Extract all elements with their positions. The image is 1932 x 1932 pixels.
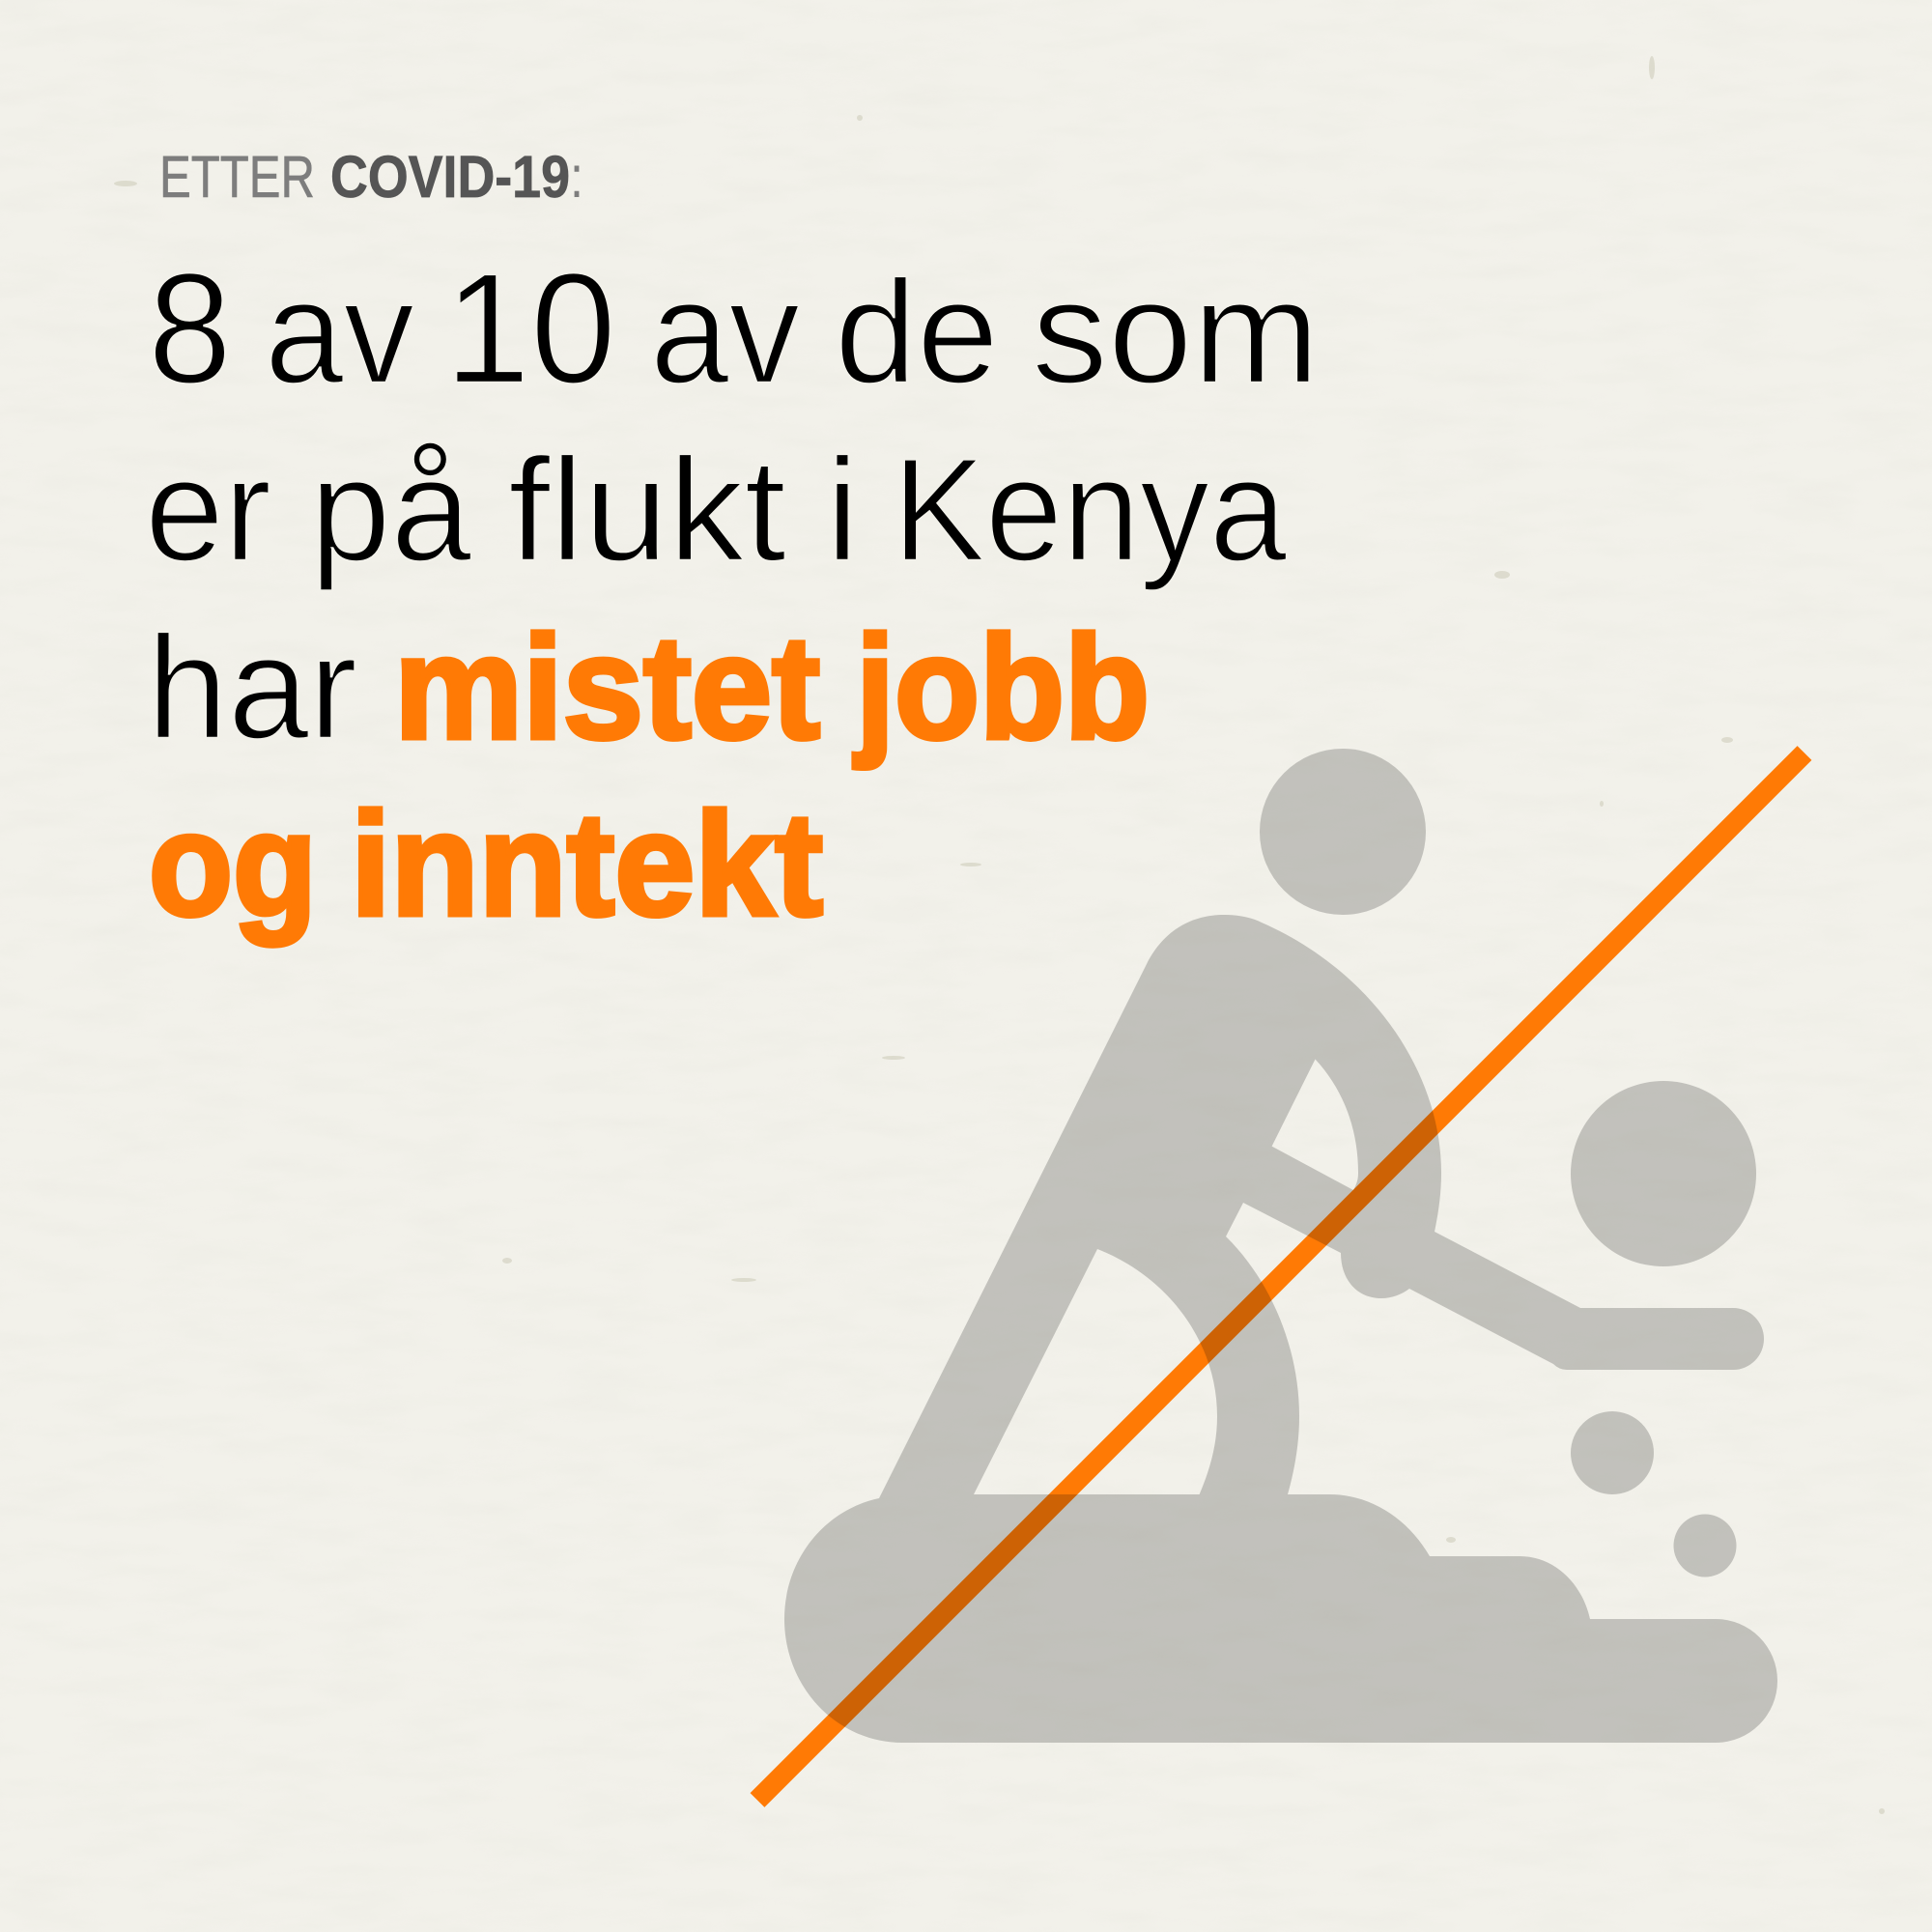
strike-through line [757, 753, 1804, 1801]
eyebrow heading: : [570, 144, 583, 210]
main headline: av [265, 250, 414, 414]
eyebrow heading: ETTER [159, 144, 315, 210]
main headline: og [149, 782, 317, 947]
icon: head [1260, 749, 1426, 915]
icon: person massaging / working on a person lying down [784, 749, 1777, 1743]
main headline [145, 240, 1320, 947]
main headline: 8 [148, 240, 232, 416]
main headline: inntekt [351, 782, 823, 947]
icon: body and base [784, 915, 1777, 1743]
main headline: mistet [394, 606, 820, 770]
main headline: på [310, 428, 471, 592]
main headline: jobb [853, 606, 1150, 770]
icon: medium dot [1571, 1411, 1654, 1494]
icon: small dot [1673, 1515, 1737, 1577]
main headline: av [650, 250, 800, 414]
main headline: de [835, 250, 999, 414]
main headline: er [145, 428, 271, 592]
main headline: 10 [444, 240, 616, 416]
main headline: som [1032, 250, 1320, 414]
main headline: flukt [508, 428, 786, 592]
main headline: i [826, 428, 859, 592]
eyebrow heading [159, 144, 583, 210]
main headline: Kenya [893, 428, 1287, 592]
icon: large ball [1571, 1081, 1756, 1266]
eyebrow heading: COVID-19 [330, 144, 570, 210]
main headline: har [147, 606, 357, 770]
